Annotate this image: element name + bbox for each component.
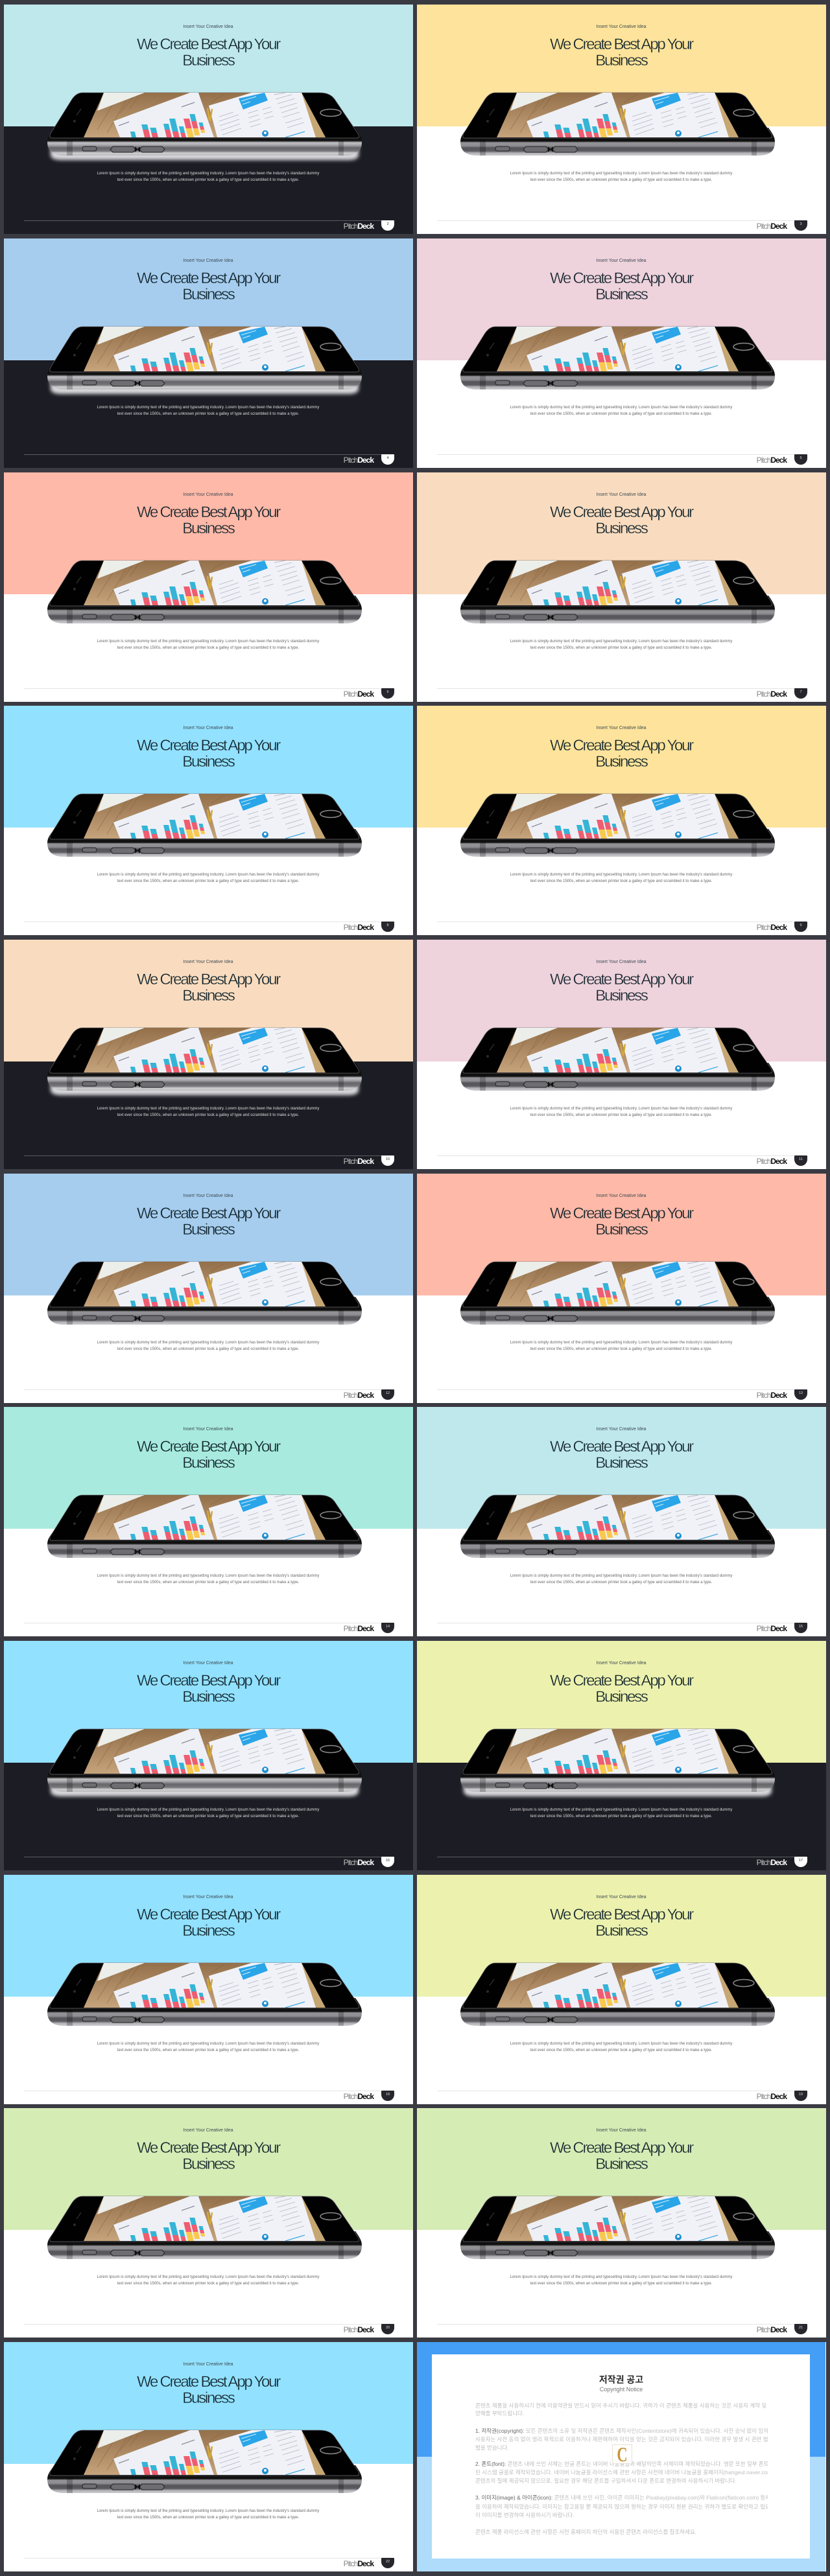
slide 2: aqua over dark: [4, 5, 413, 234]
phone mockup: [460, 560, 775, 623]
eyebrow text: Insert Your Creative Idea: [183, 1895, 233, 1899]
description: text ever since the 1500s, when an unknown printer took a galley of type and scrambled it to make a type.: [117, 1113, 299, 1117]
description: [417, 1573, 825, 1586]
description: [97, 171, 319, 182]
title: We Create Best App Your: [550, 971, 693, 988]
description: Lorem Ipsum is simply dummy text of the printing and typesetting industry. Lorem Ipsum has been the industry's standard dummy: [97, 2042, 319, 2046]
page number badge: [794, 1155, 807, 1165]
description: [4, 2274, 412, 2287]
eyebrow text: Insert Your Creative Idea: [596, 2128, 646, 2133]
eyebrow text: Insert Your Creative Idea: [183, 493, 233, 497]
description: [510, 1107, 733, 1117]
title: [4, 1205, 412, 1238]
description: text ever since the 1500s, when an unknown printer took a galley of type and scrambled it to make a type.: [117, 879, 299, 883]
phone mockup: [417, 2108, 825, 2338]
description: Lorem Ipsum is simply dummy text of the printing and typesetting industry. Lorem Ipsum has been the industry's standard dummy: [97, 2509, 319, 2513]
notice body text: 양해를 부탁드립니다.: [475, 2410, 524, 2417]
blue upper background: [417, 2342, 825, 2457]
brand logo: PitchDeck: [344, 923, 374, 932]
title: [417, 1439, 825, 1471]
notice body text: 이 이미지를 변경하여 사용하시기 바랍니다.: [475, 2512, 575, 2518]
top colour band: [417, 1641, 826, 1763]
title: Business: [182, 52, 234, 69]
title: We Create Best App Your: [550, 1438, 693, 1456]
phone mockup: [4, 1174, 412, 1403]
panel: copyright notice: [417, 2342, 826, 2571]
description: [510, 872, 733, 883]
page number badge: 6: [386, 690, 389, 693]
title: We Create Best App Your: [137, 737, 279, 754]
description: [4, 1340, 412, 1352]
top colour band: [4, 238, 413, 360]
top colour band: [417, 2108, 826, 2230]
eyebrow text: Insert Your Creative Idea: [596, 1194, 646, 1198]
description: text ever since the 1500s, when an unknown printer took a galley of type and scrambled it to make a type.: [117, 1347, 299, 1351]
title: We Create Best App Your: [137, 2373, 279, 2391]
description: text ever since the 1500s, when an unknown printer took a galley of type and scrambled it to make a type.: [530, 1815, 712, 1818]
title: [550, 504, 694, 537]
description: [4, 2508, 412, 2521]
title: We Create Best App Your: [137, 36, 279, 53]
brand logo: PitchDeck: [344, 1157, 374, 1166]
description: [417, 2041, 825, 2054]
page number badge: 10: [386, 1157, 390, 1161]
phone mockup: [460, 92, 775, 156]
brand logo: PitchDeck: [344, 2325, 374, 2334]
footer rule: [24, 1155, 382, 1156]
slide 12: blue over white: [4, 1174, 413, 1403]
eyebrow text: Insert Your Creative Idea: [183, 1194, 233, 1198]
page number badge: [794, 454, 807, 464]
description: Lorem Ipsum is simply dummy text of the printing and typesetting industry. Lorem Ipsum has been the industry's standard dummy: [510, 2275, 732, 2279]
brand logo: PitchDeck: [757, 456, 787, 465]
description: text ever since the 1500s, when an unknown printer took a galley of type and scrambled it to make a type.: [530, 1113, 712, 1117]
title: We Create Best App Your: [550, 2139, 693, 2157]
title: [4, 1907, 412, 1939]
description: [4, 1573, 412, 1586]
footer rule: [24, 220, 382, 221]
page number badge: [381, 1155, 394, 1165]
description: text ever since the 1500s, when an unknown printer took a galley of type and scrambled it to make a type.: [530, 879, 712, 883]
notice subheading: Copyright Notice: [600, 2386, 643, 2393]
eyebrow text: Insert Your Creative Idea: [596, 726, 646, 730]
description: Lorem Ipsum is simply dummy text of the printing and typesetting industry. Lorem Ipsum has been the industry's standard dummy: [510, 1107, 732, 1111]
top colour band: [417, 238, 826, 360]
description: Lorem Ipsum is simply dummy text of the printing and typesetting industry. Lorem Ipsum has been the industry's standard dummy: [510, 873, 732, 877]
page number badge: [381, 454, 394, 464]
description: text ever since the 1500s, when an unknown printer took a galley of type and scrambled it to make a type.: [117, 2048, 299, 2052]
title: We Create Best App Your: [550, 270, 693, 287]
page number badge: 9: [800, 923, 802, 927]
page number badge: 16: [386, 1859, 390, 1862]
title: Business: [182, 286, 234, 303]
eyebrow text: Insert Your Creative Idea: [183, 726, 233, 730]
eyebrow text: Insert Your Creative Idea: [183, 2362, 233, 2367]
top colour band: [417, 940, 826, 1062]
title: We Create Best App Your: [137, 1438, 279, 1456]
notice heading: 저작권 공고: [599, 2374, 643, 2385]
page number badge: [381, 2558, 394, 2568]
footer rule: [24, 688, 382, 689]
description: [510, 639, 733, 650]
page number badge: [794, 922, 807, 932]
page number badge: [794, 1623, 807, 1633]
title: [4, 1439, 412, 1471]
description: text ever since the 1500s, when an unknown printer took a galley of type and scrambled it to make a type.: [530, 2282, 712, 2286]
description: text ever since the 1500s, when an unknown printer took a galley of type and scrambled it to make a type.: [530, 412, 712, 416]
slide 18: sky over white: [4, 1875, 413, 2104]
title: [137, 504, 281, 537]
slide 14: mint over white: [4, 1407, 413, 1636]
description: text ever since the 1500s, when an unknown printer took a galley of type and scrambled it to make a type.: [530, 1347, 712, 1351]
description: [417, 2274, 825, 2287]
description: [97, 1107, 319, 1117]
top colour band: [4, 472, 413, 594]
slide 17: lime over dark: [417, 1641, 826, 1870]
title: We Create Best App Your: [137, 1672, 279, 1689]
title: Business: [182, 753, 234, 771]
centre logo mark: [612, 2444, 632, 2464]
phone mockup: [47, 92, 362, 163]
title: [550, 737, 694, 771]
description: [417, 1807, 825, 1820]
title: We Create Best App Your: [550, 504, 693, 521]
phone mockup: [4, 1875, 412, 2104]
title: Business: [595, 1688, 647, 1706]
description: text ever since the 1500s, when an unknown printer took a galley of type and scrambled it to make a type.: [117, 1581, 299, 1584]
title: We Create Best App Your: [137, 504, 279, 521]
title: We Create Best App Your: [137, 1906, 279, 1923]
title: Business: [182, 987, 234, 1004]
description: Lorem Ipsum is simply dummy text of the printing and typesetting industry. Lorem Ipsum has been the industry's standard dummy: [510, 172, 732, 176]
title: [137, 971, 281, 1004]
title: Business: [595, 1454, 647, 1472]
description: text ever since the 1500s, when an unknown printer took a galley of type and scrambled it to make a type.: [117, 2516, 299, 2520]
footer rule: [437, 220, 795, 221]
brand logo: PitchDeck: [757, 690, 787, 699]
description: text ever since the 1500s, when an unknown printer took a galley of type and scrambled it to make a type.: [530, 1581, 712, 1584]
page number badge: 15: [799, 1624, 803, 1628]
title: [417, 1907, 825, 1939]
slide 16: sky over dark: [4, 1641, 413, 1870]
footer rule: [24, 454, 382, 455]
title: [550, 971, 694, 1004]
phone mockup: [4, 1407, 412, 1636]
brand logo: PitchDeck: [344, 2092, 374, 2101]
description: [4, 1807, 412, 1820]
title: Business: [182, 1922, 234, 1940]
notice body text: [475, 2342, 768, 2571]
description: [417, 1340, 825, 1352]
page number badge: [794, 688, 807, 699]
brand logo: PitchDeck: [757, 222, 787, 231]
phone mockup: [417, 1407, 825, 1636]
slide 6: salmon over white: [4, 472, 413, 702]
description: Lorem Ipsum is simply dummy text of the printing and typesetting industry. Lorem Ipsum has been the industry's standard dummy: [97, 640, 319, 644]
title: [137, 36, 281, 69]
page number badge: [794, 1389, 807, 1400]
slide 19: lime over white: [417, 1875, 826, 2104]
phone mockup: [417, 1875, 825, 2104]
brand logo: PitchDeck: [757, 1858, 787, 1867]
page number badge: 20: [386, 2325, 390, 2329]
page number badge: 11: [799, 1157, 803, 1161]
title: We Create Best App Your: [550, 737, 693, 754]
description: text ever since the 1500s, when an unknown printer took a galley of type and scrambled it to make a type.: [117, 646, 299, 650]
description: Lorem Ipsum is simply dummy text of the printing and typesetting industry. Lorem Ipsum has been the industry's standard dummy: [510, 1341, 732, 1345]
page number badge: [381, 220, 394, 231]
page number badge: 19: [799, 2092, 803, 2096]
slide 9: yellow over white: [417, 706, 826, 935]
page number badge: 3: [800, 222, 802, 226]
top colour band: [417, 1407, 826, 1529]
title: Business: [595, 753, 647, 771]
description: Lorem Ipsum is simply dummy text of the printing and typesetting industry. Lorem Ipsum has been the industry's standard dummy: [97, 172, 319, 176]
phone mockup: [417, 1174, 825, 1403]
title: Business: [595, 1221, 647, 1238]
eyebrow text: Insert Your Creative Idea: [183, 25, 233, 29]
title: Business: [182, 2155, 234, 2173]
page number badge: 7: [800, 690, 802, 693]
brand logo: PitchDeck: [344, 2559, 374, 2568]
top colour band: [4, 1641, 413, 1763]
description: text ever since the 1500s, when an unknown printer took a galley of type and scrambled it to make a type.: [117, 2282, 299, 2286]
description: Lorem Ipsum is simply dummy text of the printing and typesetting industry. Lorem Ipsum has been the industry's standard dummy: [510, 406, 732, 410]
title: Business: [595, 520, 647, 537]
title: [4, 2374, 412, 2406]
slide 10: peach over dark: [4, 940, 413, 1169]
title: [4, 1673, 412, 1705]
description: [510, 171, 733, 182]
footer rule: [24, 2558, 382, 2559]
phone mockup: [47, 1028, 362, 1098]
slide 8: sky over white: [4, 706, 413, 935]
description: [510, 406, 733, 416]
title: We Create Best App Your: [550, 1672, 693, 1689]
description: [97, 639, 319, 650]
title: We Create Best App Your: [137, 2139, 279, 2157]
page number badge: [794, 220, 807, 231]
phone mockup: [460, 327, 775, 389]
title: Business: [182, 1454, 234, 1472]
top colour band: [4, 1875, 413, 1997]
eyebrow text: Insert Your Creative Idea: [183, 1427, 233, 1432]
brand logo: PitchDeck: [757, 1391, 787, 1400]
description: Lorem Ipsum is simply dummy text of the printing and typesetting industry. Lorem Ipsum has been the industry's standard dummy: [510, 1574, 732, 1578]
top colour band: [4, 940, 413, 1062]
notice body text: 콘텐츠의 질에 제공되지 않으므로, 필요한 경우 해당 폰트를 구입하셔서 다운 폰트로 변경하여 사용하시기 바랍니다.: [475, 2477, 737, 2484]
top colour band: [417, 706, 826, 828]
brand logo: PitchDeck: [757, 2092, 787, 2101]
page number badge: [381, 1623, 394, 1633]
eyebrow text: Insert Your Creative Idea: [596, 1661, 646, 1665]
phone mockup: [47, 560, 362, 623]
description: Lorem Ipsum is simply dummy text of the printing and typesetting industry. Lorem Ipsum has been the industry's standard dummy: [97, 1808, 319, 1812]
page number badge: [381, 1389, 394, 1400]
page number badge: 2: [386, 222, 389, 226]
description: text ever since the 1500s, when an unknown printer took a galley of type and scrambled it to make a type.: [530, 646, 712, 650]
page number badge: [794, 2091, 807, 2101]
slide 5: pink over white: [417, 238, 826, 468]
slide 4: blue over dark: [4, 238, 413, 468]
phone mockup: [4, 2108, 412, 2338]
description: Lorem Ipsum is simply dummy text of the printing and typesetting industry. Lorem Ipsum has been the industry's standard dummy: [510, 1808, 732, 1812]
description: text ever since the 1500s, when an unknown printer took a galley of type and scrambled it to make a type.: [530, 2048, 712, 2052]
description: Lorem Ipsum is simply dummy text of the printing and typesetting industry. Lorem Ipsum has been the industry's standard dummy: [97, 873, 319, 877]
phone mockup: [460, 1028, 775, 1091]
brand logo: PitchDeck: [344, 1391, 374, 1400]
eyebrow text: Insert Your Creative Idea: [596, 25, 646, 29]
title: [417, 2140, 825, 2172]
eyebrow text: Insert Your Creative Idea: [183, 1661, 233, 1665]
title: [417, 1205, 825, 1238]
title: Business: [595, 286, 647, 303]
brand logo: PitchDeck: [344, 1858, 374, 1867]
page number badge: [381, 2091, 394, 2101]
top colour band: [4, 5, 413, 126]
description: [4, 2041, 412, 2054]
eyebrow text: Insert Your Creative Idea: [596, 960, 646, 964]
footer rule: [24, 2324, 382, 2325]
eyebrow text: Insert Your Creative Idea: [183, 2128, 233, 2133]
footer rule: [24, 1389, 382, 1390]
page number badge: 18: [386, 2092, 390, 2096]
footer rule: [437, 454, 795, 455]
title: [550, 270, 694, 303]
brand logo: PitchDeck: [757, 923, 787, 932]
description: Lorem Ipsum is simply dummy text of the printing and typesetting industry. Lorem Ipsum has been the industry's standard dummy: [97, 1574, 319, 1578]
page number badge: 22: [386, 2560, 390, 2564]
title: Business: [182, 1221, 234, 1238]
eyebrow text: Insert Your Creative Idea: [596, 1895, 646, 1899]
phone mockup: [460, 793, 775, 857]
page number badge: 4: [386, 456, 389, 460]
slide 20: green over white: [4, 2108, 413, 2338]
eyebrow text: Insert Your Creative Idea: [596, 1427, 646, 1432]
page number badge: [381, 2324, 394, 2334]
title: We Create Best App Your: [550, 1205, 693, 1222]
page number badge: [381, 1857, 394, 1866]
footer rule: [437, 1389, 795, 1390]
top colour band: [4, 706, 413, 828]
slide 21: green over white: [417, 2108, 826, 2338]
description: text ever since the 1500s, when an unknown printer took a galley of type and scrambled it to make a type.: [530, 178, 712, 182]
title: [137, 270, 281, 303]
brand logo: PitchDeck: [344, 222, 374, 231]
page number badge: 17: [799, 1859, 803, 1862]
title: [417, 1673, 825, 1705]
page number badge: [794, 2324, 807, 2334]
top colour band: [4, 2342, 413, 2464]
brand logo: PitchDeck: [344, 690, 374, 699]
title: Business: [595, 2155, 647, 2173]
notice body text: 콘텐츠 제품 라이선스에 관한 사항은 사전 홈페이지 하단의 사용된 콘텐츠 라이선스를 참조하세요.: [475, 2529, 696, 2535]
title: We Create Best App Your: [550, 1906, 693, 1923]
slide 15: aqua over white: [417, 1407, 826, 1636]
description: Lorem Ipsum is simply dummy text of the printing and typesetting industry. Lorem Ipsum has been the industry's standard dummy: [97, 1341, 319, 1345]
page number badge: 14: [386, 1624, 390, 1628]
top colour band: [417, 1174, 826, 1295]
phone mockup: [47, 327, 362, 397]
slide 3: yellow over white: [417, 5, 826, 234]
footer rule: [437, 2324, 795, 2325]
eyebrow text: Insert Your Creative Idea: [596, 259, 646, 263]
description: text ever since the 1500s, when an unknown printer took a galley of type and scrambled it to make a type.: [117, 178, 299, 182]
brand logo: PitchDeck: [344, 456, 374, 465]
top colour band: [417, 1875, 826, 1997]
slide 22: sky over white: [4, 2342, 413, 2571]
page number badge: [381, 688, 394, 699]
description: Lorem Ipsum is simply dummy text of the printing and typesetting industry. Lorem Ipsum has been the industry's standard dummy: [97, 406, 319, 410]
top colour band: [4, 1407, 413, 1529]
title: [550, 36, 694, 69]
title: Business: [595, 987, 647, 1004]
brand logo: PitchDeck: [757, 1624, 787, 1633]
description: text ever since the 1500s, when an unknown printer took a galley of type and scrambled it to make a type.: [117, 1815, 299, 1818]
page number badge: 13: [799, 1391, 803, 1395]
footer rule: [437, 1155, 795, 1156]
footer rule: [437, 688, 795, 689]
title: We Create Best App Your: [550, 36, 693, 53]
title: [137, 737, 281, 771]
description: Lorem Ipsum is simply dummy text of the printing and typesetting industry. Lorem Ipsum has been the industry's standard dummy: [97, 1107, 319, 1111]
page number badge: 5: [800, 456, 802, 460]
description: text ever since the 1500s, when an unknown printer took a galley of type and scrambled it to make a type.: [117, 412, 299, 416]
slide 13: salmon over white: [417, 1174, 826, 1403]
title: Business: [182, 1688, 234, 1706]
title: We Create Best App Your: [137, 270, 279, 287]
white notice card: [432, 2354, 810, 2559]
page number badge: 8: [386, 923, 389, 927]
brand logo: PitchDeck: [757, 1157, 787, 1166]
eyebrow text: Insert Your Creative Idea: [596, 493, 646, 497]
brand logo: PitchDeck: [757, 2325, 787, 2334]
description: Lorem Ipsum is simply dummy text of the printing and typesetting industry. Lorem Ipsum has been the industry's standard dummy: [510, 640, 732, 644]
eyebrow text: Insert Your Creative Idea: [183, 960, 233, 964]
description: Lorem Ipsum is simply dummy text of the printing and typesetting industry. Lorem Ipsum has been the industry's standard dummy: [97, 2275, 319, 2279]
brand logo: PitchDeck: [344, 1624, 374, 1633]
title: We Create Best App Your: [137, 1205, 279, 1222]
eyebrow text: Insert Your Creative Idea: [183, 259, 233, 263]
phone mockup: [4, 2342, 412, 2571]
top colour band: [417, 5, 826, 126]
description: Lorem Ipsum is simply dummy text of the printing and typesetting industry. Lorem Ipsum has been the industry's standard dummy: [510, 2042, 732, 2046]
title: Business: [595, 52, 647, 69]
slide 11: pink over white: [417, 940, 826, 1169]
title: Business: [182, 2389, 234, 2407]
page number badge: 12: [386, 1391, 390, 1395]
light blue lower background: [417, 2457, 825, 2571]
title: [4, 2140, 412, 2172]
title: We Create Best App Your: [137, 971, 279, 988]
description: [97, 406, 319, 416]
description: [97, 872, 319, 883]
top colour band: [4, 1174, 413, 1295]
page number badge: [381, 922, 394, 932]
page number badge: [794, 1857, 807, 1866]
page number badge: 21: [799, 2325, 803, 2329]
title: Business: [182, 520, 234, 537]
top colour band: [4, 2108, 413, 2230]
phone mockup: [4, 1641, 412, 1870]
phone mockup: [417, 1641, 825, 1870]
notice body text: 벌을 받습니다.: [475, 2444, 509, 2451]
top colour band: [417, 472, 826, 594]
title: Business: [595, 1922, 647, 1940]
phone mockup: [47, 793, 362, 857]
slide 7: peach over white: [417, 472, 826, 702]
